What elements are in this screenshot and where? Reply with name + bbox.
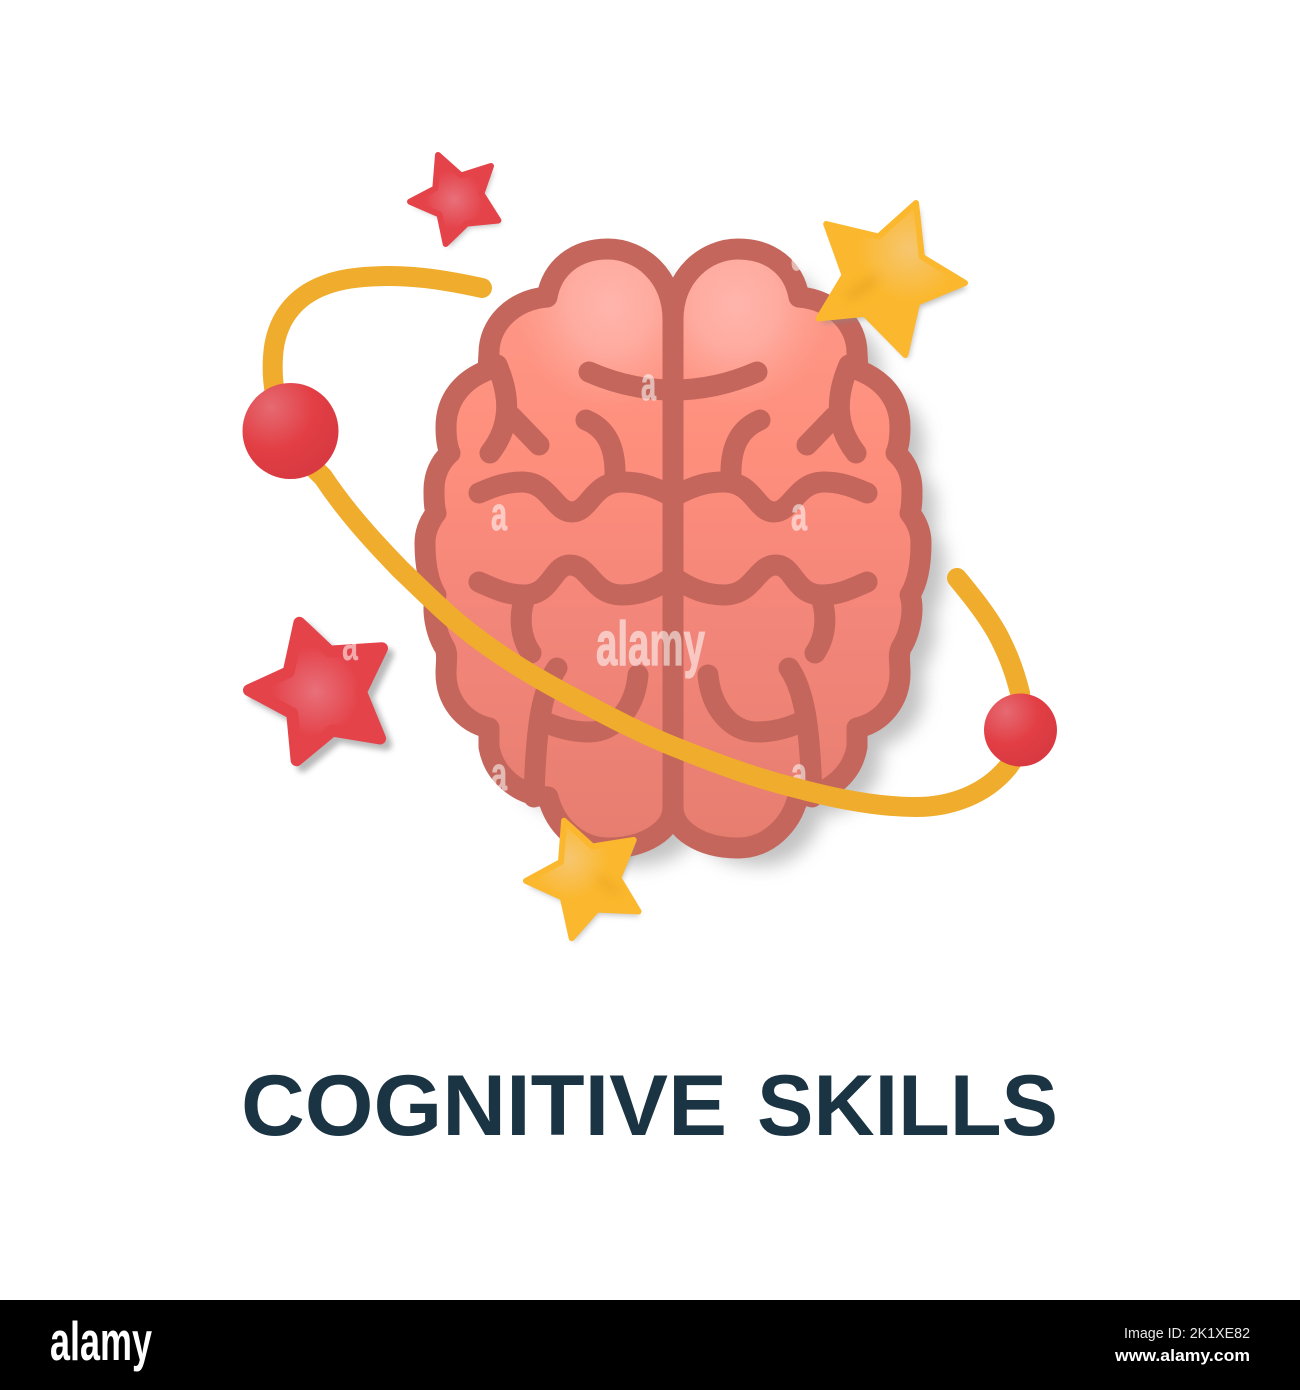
brain drop shadow [449, 267, 945, 866]
watermark letters on brain: a [491, 747, 508, 800]
footer logo: alamy: alamy [50, 1310, 152, 1372]
sphere: left [242, 383, 338, 479]
watermark letters on brain: a [791, 487, 808, 540]
watermark letters on brain: a [641, 357, 656, 410]
watermark letters on brain: a [791, 227, 808, 280]
watermark letters on brain: a [491, 487, 508, 540]
star: small red [410, 155, 501, 248]
star: large red [249, 623, 388, 766]
sphere: right [984, 694, 1057, 766]
star: large gold [819, 203, 968, 360]
star: bottom gold [526, 821, 640, 943]
footer website: www.alamy.com [1114, 1346, 1250, 1365]
title [241, 1058, 1058, 1154]
orbit arc: yellow ring [273, 276, 1021, 807]
footer bar [0, 1300, 1300, 1390]
icon: brain [425, 200, 921, 848]
watermark: alamy: alamy [596, 610, 705, 679]
watermark letter on red star: a [342, 617, 359, 670]
watermark letters on brain: a [791, 747, 808, 800]
footer image id: Image ID: 2K1XE82 [1124, 1325, 1250, 1342]
title: COGNITIVE [241, 1058, 727, 1154]
title: SKILLS [757, 1058, 1058, 1154]
watermark letters on brain [491, 227, 808, 800]
